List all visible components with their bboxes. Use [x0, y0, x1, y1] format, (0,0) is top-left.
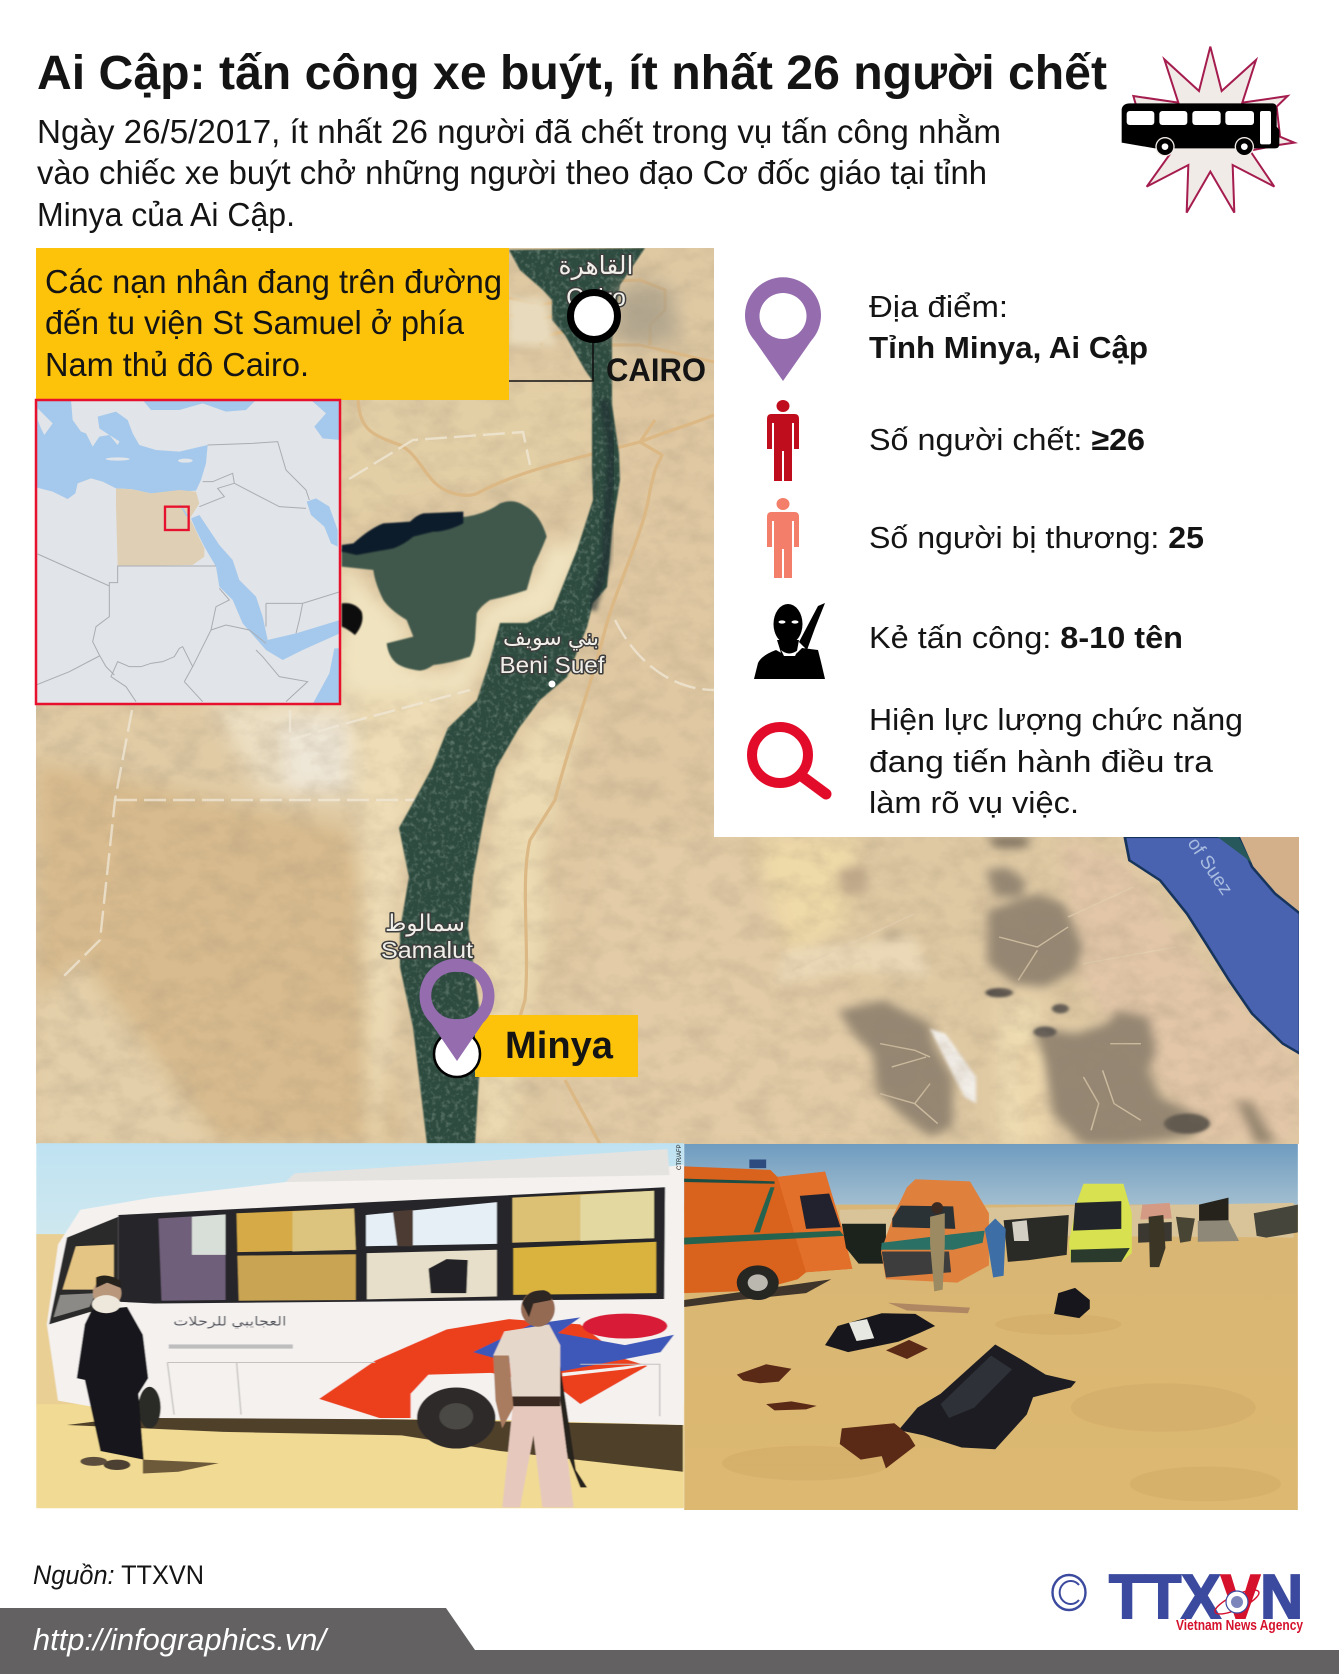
photo: attacked bus — [36, 1143, 684, 1508]
callout: victims route — [36, 248, 509, 400]
satellite map — [36, 248, 1300, 1145]
photo: ambulances and bodies — [684, 1144, 1298, 1512]
text: location: Địa điểm: — [869, 289, 1008, 324]
intro text block: Ngày 26/5/2017, ít nhất 26 người đã chết trong vụ tấn công nhằm — [37, 113, 1001, 150]
map labels: Samalut — [381, 937, 474, 963]
icon: dead person — [767, 400, 799, 481]
icon: bus — [1122, 103, 1279, 156]
Gulf of Suez label: of Suez — [1183, 834, 1236, 899]
wheels — [417, 1387, 496, 1449]
lower panels — [167, 1362, 660, 1416]
logo: copyright mark — [1052, 1575, 1086, 1610]
livery — [319, 1319, 647, 1418]
terrain: rocky outcrops east — [777, 837, 1275, 1145]
text: investigation — [869, 702, 1243, 820]
callout: victims route: đến tu viện St Samuel ở phía — [45, 304, 465, 341]
callout: victims route: Nam thủ đô Cairo. — [45, 346, 309, 383]
text: investigation: Hiện lực lượng chức năng — [869, 702, 1243, 737]
bus lettering: العجايبي للرحلات — [173, 1315, 286, 1329]
text: investigation: đang tiến hành điều tra — [869, 744, 1214, 779]
map labels — [381, 252, 633, 963]
desert track dashes — [60, 432, 714, 980]
map labels: سمالوط — [385, 910, 465, 937]
inset: Egypt — [116, 488, 204, 566]
text: deaths: Số người chết: ≥26 — [869, 422, 1145, 457]
intro text block — [37, 113, 1001, 233]
text: injured: Số người bị thương: 25 — [869, 520, 1204, 555]
terrain: pale drainage veins — [858, 888, 1164, 1130]
person — [930, 1213, 945, 1291]
orange ambulance — [684, 1166, 852, 1293]
text: investigation: làm rõ vụ việc. — [869, 785, 1079, 820]
icon: masked attacker — [754, 603, 825, 679]
terrain: desert shading — [36, 692, 1041, 1144]
window band — [118, 1187, 665, 1304]
footer band: http://infographics.vn/ — [33, 1622, 329, 1657]
marker: Minya: Minya — [505, 1025, 614, 1067]
footer band — [0, 1608, 1339, 1674]
icon: bus in explosion — [1122, 47, 1294, 213]
callout: victims route: Các nạn nhân đang trên đường — [45, 263, 502, 300]
bus body — [47, 1165, 684, 1425]
marker: Cairo — [509, 292, 706, 388]
Gulf of Suez water — [1125, 837, 1300, 1054]
intro text block: vào chiếc xe buýt chở những người theo đạo Cơ đốc giáo tại tỉnh — [37, 154, 987, 191]
black car — [842, 1224, 886, 1264]
body bags — [825, 1313, 935, 1352]
marker: Cairo: CAIRO — [606, 352, 706, 388]
logo: copyright and TTXVN — [1052, 1563, 1303, 1634]
map labels: القاهرة — [559, 252, 633, 280]
map labels: Cairo — [566, 284, 626, 312]
dark lake west — [342, 603, 362, 635]
scrap on the sand — [888, 1303, 970, 1313]
logo: agency name: Vietnam News Agency — [1176, 1618, 1303, 1634]
ground shadow — [684, 1279, 831, 1307]
icon: explosion star — [1133, 47, 1294, 213]
Fayoum lake — [342, 512, 463, 555]
inset locator map — [36, 400, 340, 704]
priest — [77, 1307, 148, 1460]
icon: injured person — [767, 498, 799, 578]
inset: islands and peninsula — [38, 408, 193, 463]
yellow ambulance — [1069, 1184, 1132, 1263]
logo: TTXVN wordmark: TTXVN — [1109, 1563, 1303, 1632]
photo credit: CTR/AFP — [677, 1144, 683, 1170]
Cairo grey urban area — [612, 285, 680, 345]
distant vehicles and soldiers — [1140, 1203, 1172, 1220]
policeman — [493, 1324, 560, 1401]
text: location — [869, 289, 1148, 365]
icon: magnifying glass — [752, 727, 826, 794]
marker: Minya — [420, 958, 638, 1077]
terrain: rock texture — [36, 248, 1299, 1144]
inset: seas — [36, 400, 340, 704]
panel: key facts — [714, 248, 1299, 837]
inset: target square — [165, 507, 189, 530]
source: Nguồn: TTXVN — [33, 1560, 204, 1590]
sand ripples — [722, 1314, 1281, 1501]
icon: location pin — [745, 277, 821, 381]
text: attackers: Kẻ tấn công: 8-10 tên — [869, 620, 1183, 655]
sand halo around oasis — [342, 517, 587, 693]
map labels: Beni Suef — [500, 652, 605, 678]
crowd — [1004, 1215, 1069, 1262]
second ambulance — [881, 1179, 989, 1283]
blood stains — [737, 1340, 928, 1468]
Fayoum oasis — [342, 501, 547, 671]
Cairo west light patch — [509, 298, 555, 345]
map labels: بني سويف — [503, 625, 599, 651]
Nile green valley — [398, 248, 646, 1144]
inset: country borders — [36, 442, 340, 702]
road network — [358, 280, 714, 1144]
title: Ai Cập: tấn công xe buýt, ít nhất 26 người chết — [37, 47, 1107, 100]
intro text block: Minya của Ai Cập. — [37, 196, 295, 233]
text: location: Tỉnh Minya, Ai Cập — [869, 330, 1148, 365]
